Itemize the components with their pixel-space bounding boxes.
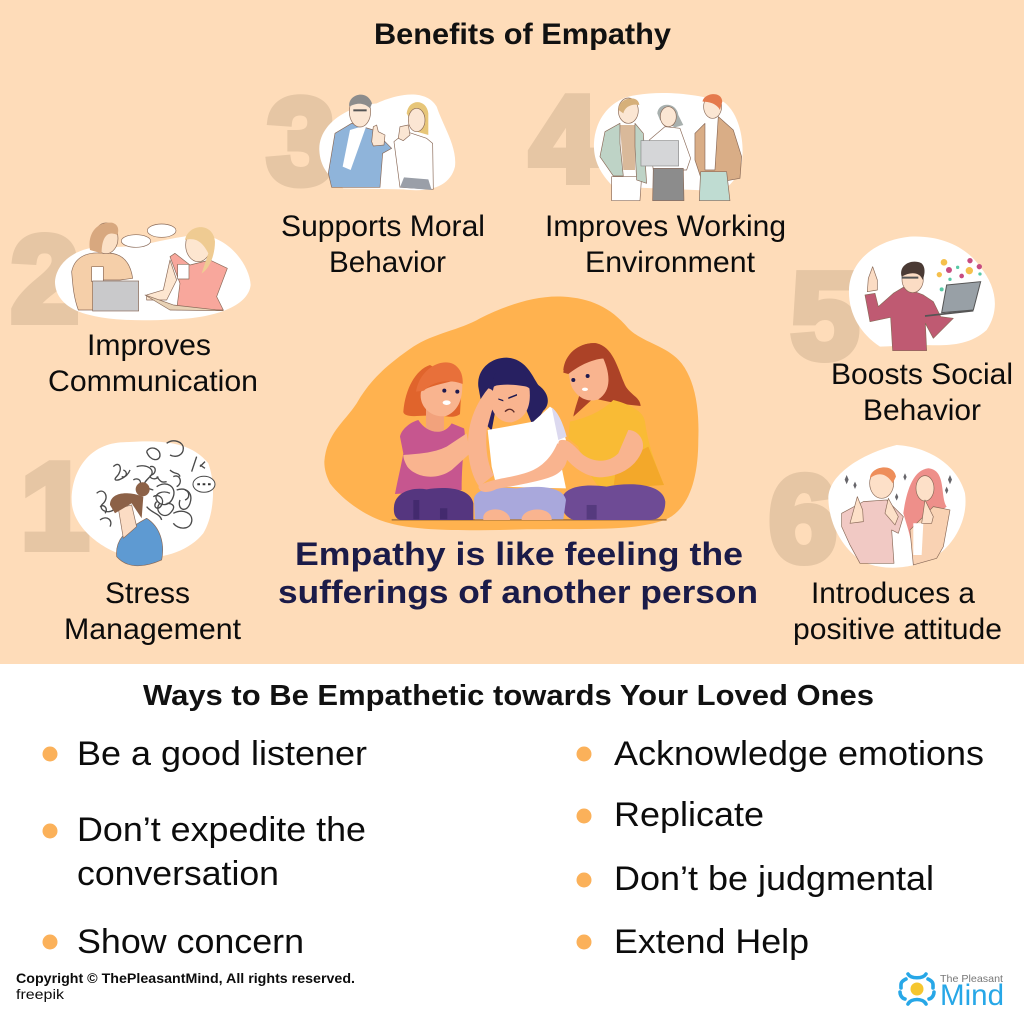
label	[48, 329, 258, 398]
headline: empathy definition: Empathy is like feeling the	[295, 536, 743, 572]
label: Introduces a	[811, 577, 975, 610]
benefit 6: introduces a positive attitude	[769, 445, 1002, 646]
number 2: 2	[11, 211, 79, 347]
list: left column of ways: Don’t expedite the	[77, 811, 366, 849]
list: right column of ways: Don’t be judgmental	[614, 860, 934, 898]
list: left column of ways: Be a good listener	[77, 735, 367, 773]
benefit 4: improves working environment	[530, 71, 786, 279]
logo: The Pleasant Mind: Mind	[940, 979, 1004, 1012]
label: Behavior	[863, 394, 981, 427]
label: Communication	[48, 365, 258, 398]
label: Boosts Social	[831, 358, 1013, 391]
list: right column of ways	[576, 735, 984, 961]
number 1: 1	[21, 438, 89, 574]
list: left column of ways	[42, 735, 367, 961]
label	[64, 577, 242, 646]
number 5: 5	[791, 248, 859, 384]
right girl's arm on friend's shoulder	[558, 430, 643, 477]
ground line	[392, 519, 667, 521]
panel: benefits background	[0, 0, 1024, 664]
benefit 2: improves communication	[11, 211, 258, 398]
headline: empathy definition: sufferings of another person	[278, 574, 758, 610]
list: right column of ways: Replicate	[614, 796, 764, 834]
heading: ways to be empathetic: Ways to Be Empathetic towards Your Loved Ones	[143, 680, 874, 712]
copyright credits: Copyright © ThePleasantMind, All rights reserved.	[16, 971, 355, 986]
icon: two colleagues giving thumbs up	[319, 94, 455, 190]
logo: The Pleasant Mind: The Pleasant	[940, 973, 1003, 985]
label: Improves	[87, 329, 211, 362]
label: Supports Moral	[281, 210, 485, 243]
icon: man with laptop and social emojis	[849, 237, 995, 351]
label: Environment	[585, 246, 756, 279]
label	[831, 358, 1013, 427]
orange blob backdrop	[324, 296, 698, 530]
benefit 3: supports moral behavior	[267, 73, 485, 279]
icon: three coworkers around a laptop	[594, 93, 743, 201]
benefit 1: stress management	[21, 438, 242, 646]
list: right column of ways: Extend Help	[614, 923, 809, 961]
icon: two women talking over coffee	[55, 223, 251, 320]
title: Benefits of Empathy: Benefits of Empathy	[374, 18, 671, 51]
number 3: 3	[267, 73, 335, 209]
copyright credits	[16, 971, 355, 1002]
left girl	[394, 362, 473, 520]
label: Improves Working	[545, 210, 786, 243]
number 4: 4	[530, 71, 598, 207]
icon: stressed woman with tangled thoughts	[72, 441, 215, 566]
label	[281, 210, 485, 279]
label: Stress	[105, 577, 190, 610]
icon: sun mark	[900, 974, 934, 1004]
label	[545, 210, 786, 279]
number 6: 6	[769, 451, 837, 587]
central illustration: friends comforting a sad girl	[324, 296, 698, 530]
icon: two friends giving thumbs up	[828, 445, 966, 568]
label: Management	[64, 613, 242, 646]
middle girl	[468, 358, 567, 520]
label	[793, 577, 1002, 646]
logo: The Pleasant Mind	[900, 973, 1004, 1012]
right girl	[562, 343, 665, 520]
list: left column of ways: Show concern	[77, 923, 304, 961]
label: positive attitude	[793, 613, 1002, 646]
copyright credits: freepik	[16, 987, 64, 1002]
headline: empathy definition	[278, 536, 758, 610]
list: right column of ways: Acknowledge emotions	[614, 735, 984, 773]
list: left column of ways: conversation	[77, 855, 279, 893]
label: Behavior	[329, 246, 446, 279]
benefit 5: boosts social behavior	[791, 237, 1013, 427]
